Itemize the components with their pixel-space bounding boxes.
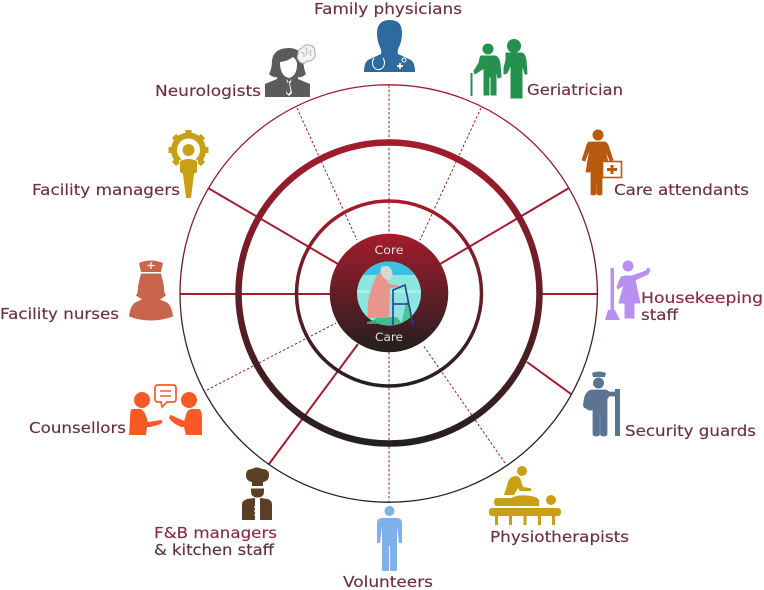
- icon: cleaner with broom: [605, 260, 650, 320]
- solid spokes: [180, 188, 597, 464]
- label: Counsellors: [29, 419, 126, 437]
- label: Facility managers: [32, 181, 180, 199]
- team member: housekeeping staff: [605, 260, 763, 324]
- team member: volunteers: [343, 506, 433, 590]
- team member: facility managers: [32, 130, 208, 199]
- team member: geriatrician: [470, 40, 623, 99]
- team member: F&B managers and kitchen staff: [154, 468, 277, 559]
- label second line: & kitchen staff: [154, 541, 275, 559]
- label second line: staff: [641, 306, 679, 324]
- core care hub: [330, 234, 448, 352]
- icon: attendant with medical kit: [582, 130, 622, 195]
- team member: neurologists: [155, 45, 315, 100]
- icon: elderly patient and doctor: [470, 40, 527, 98]
- label: Care attendants: [614, 181, 749, 199]
- icon: standing person: [377, 506, 402, 571]
- icon: chef: [242, 468, 272, 520]
- icon: doctor: [364, 20, 415, 72]
- label: Neurologists: [155, 82, 261, 100]
- label: F&B managers: [154, 524, 277, 542]
- icon: person inside gear: [168, 130, 208, 198]
- dotted spokes: [207, 85, 505, 502]
- team member: care attendants: [582, 130, 749, 199]
- team member: facility nurses: [0, 260, 173, 323]
- label: Core: Core: [374, 243, 404, 257]
- icon: two people talking: [129, 385, 202, 435]
- label: Geriatrician: [527, 81, 623, 99]
- icon: neurologist with brain: [265, 45, 315, 97]
- team member: security guards: [584, 372, 756, 440]
- label: Housekeeping: [641, 289, 763, 307]
- label: Family physicians: [314, 0, 462, 18]
- team member: counsellors: [29, 385, 202, 437]
- team member: family physicians: [314, 0, 462, 72]
- label: Facility nurses: [0, 305, 119, 323]
- outer ring: [180, 85, 597, 502]
- icon: guard with baton: [584, 372, 620, 436]
- icon: massage table: [489, 466, 561, 525]
- inner ring: [296, 201, 482, 386]
- label: Care: Care: [375, 330, 403, 344]
- icon: nurse: [129, 260, 173, 320]
- label: Physiotherapists: [490, 528, 629, 546]
- illustration: elderly woman with walker: [357, 261, 421, 326]
- label: Security guards: [625, 422, 756, 440]
- middle ring: [238, 142, 540, 444]
- team member: physiotherapists: [489, 466, 629, 546]
